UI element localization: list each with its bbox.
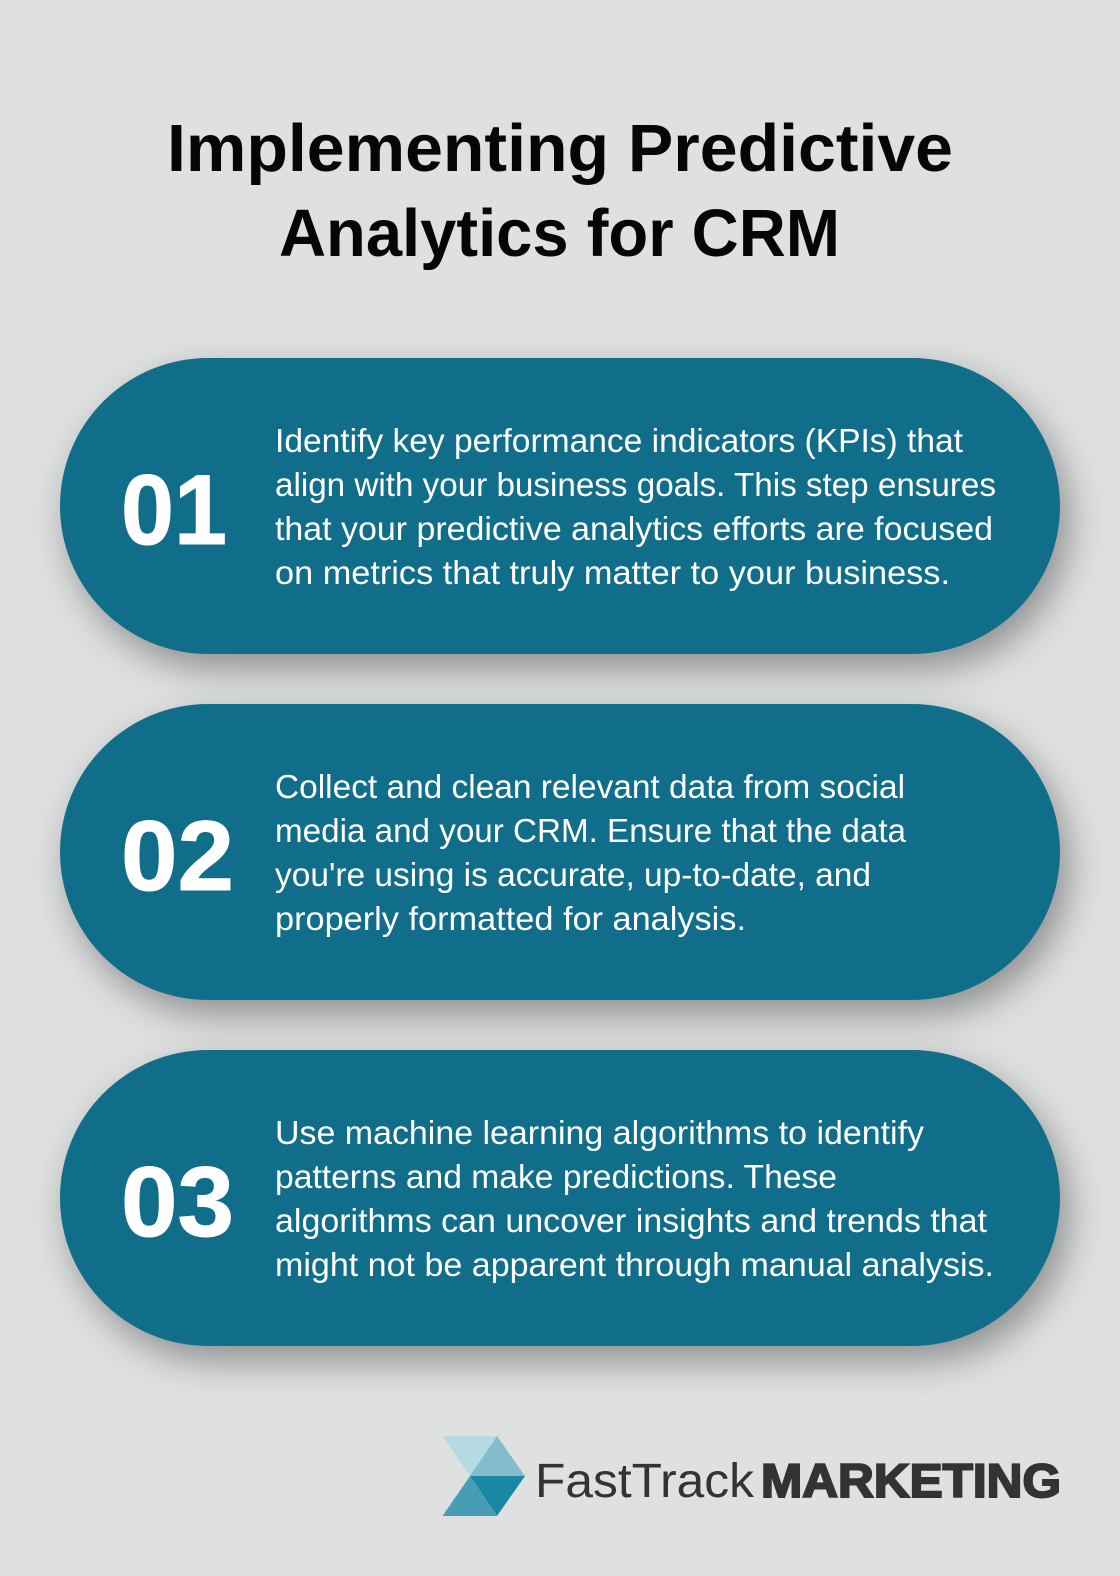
panel: step 02: [60, 704, 1060, 1000]
pill background 02: [60, 704, 1060, 1000]
text block 03: [275, 1114, 994, 1283]
title: Analytics for CRM: [279, 196, 840, 271]
number 01: 01: [121, 454, 227, 565]
text block 03: patterns and make predictions. These: [275, 1158, 837, 1195]
number 02: 02: [121, 800, 234, 911]
logo wordmark: [535, 1454, 1061, 1508]
text block 02: Collect and clean relevant data from social: [275, 768, 905, 805]
logo wordmark: FastTrack: [535, 1455, 755, 1508]
text block 01: that your predictive analytics efforts are focused: [275, 510, 993, 547]
text block 01: align with your business goals. This step ensures: [275, 466, 996, 503]
text block 02: [275, 768, 907, 937]
pill background 01: [60, 358, 1060, 654]
panel: step 01: [60, 358, 1060, 654]
title: [167, 111, 953, 271]
text block 03: Use machine learning algorithms to identify: [275, 1114, 925, 1151]
icon: logo mark: [442, 1436, 525, 1516]
text block 01: [275, 422, 996, 591]
text block 03: algorithms can uncover insights and trends that: [275, 1202, 987, 1239]
text block 02: properly formatted for analysis.: [275, 900, 746, 937]
text block 02: media and your CRM. Ensure that the data: [275, 812, 907, 849]
logo wordmark: MARKETING: [761, 1454, 1061, 1507]
logo: [442, 1436, 1061, 1516]
text block 02: you're using is accurate, up-to-date, and: [275, 856, 871, 893]
panel: step 03: [60, 1050, 1060, 1346]
title: Implementing Predictive: [167, 111, 953, 186]
text block 03: might not be apparent through manual analysis.: [275, 1246, 994, 1283]
pill background 03: [60, 1050, 1060, 1346]
number 03: 03: [121, 1146, 234, 1257]
text block 01: on metrics that truly matter to your business.: [275, 554, 950, 591]
text block 01: Identify key performance indicators (KPIs) that: [275, 422, 963, 459]
